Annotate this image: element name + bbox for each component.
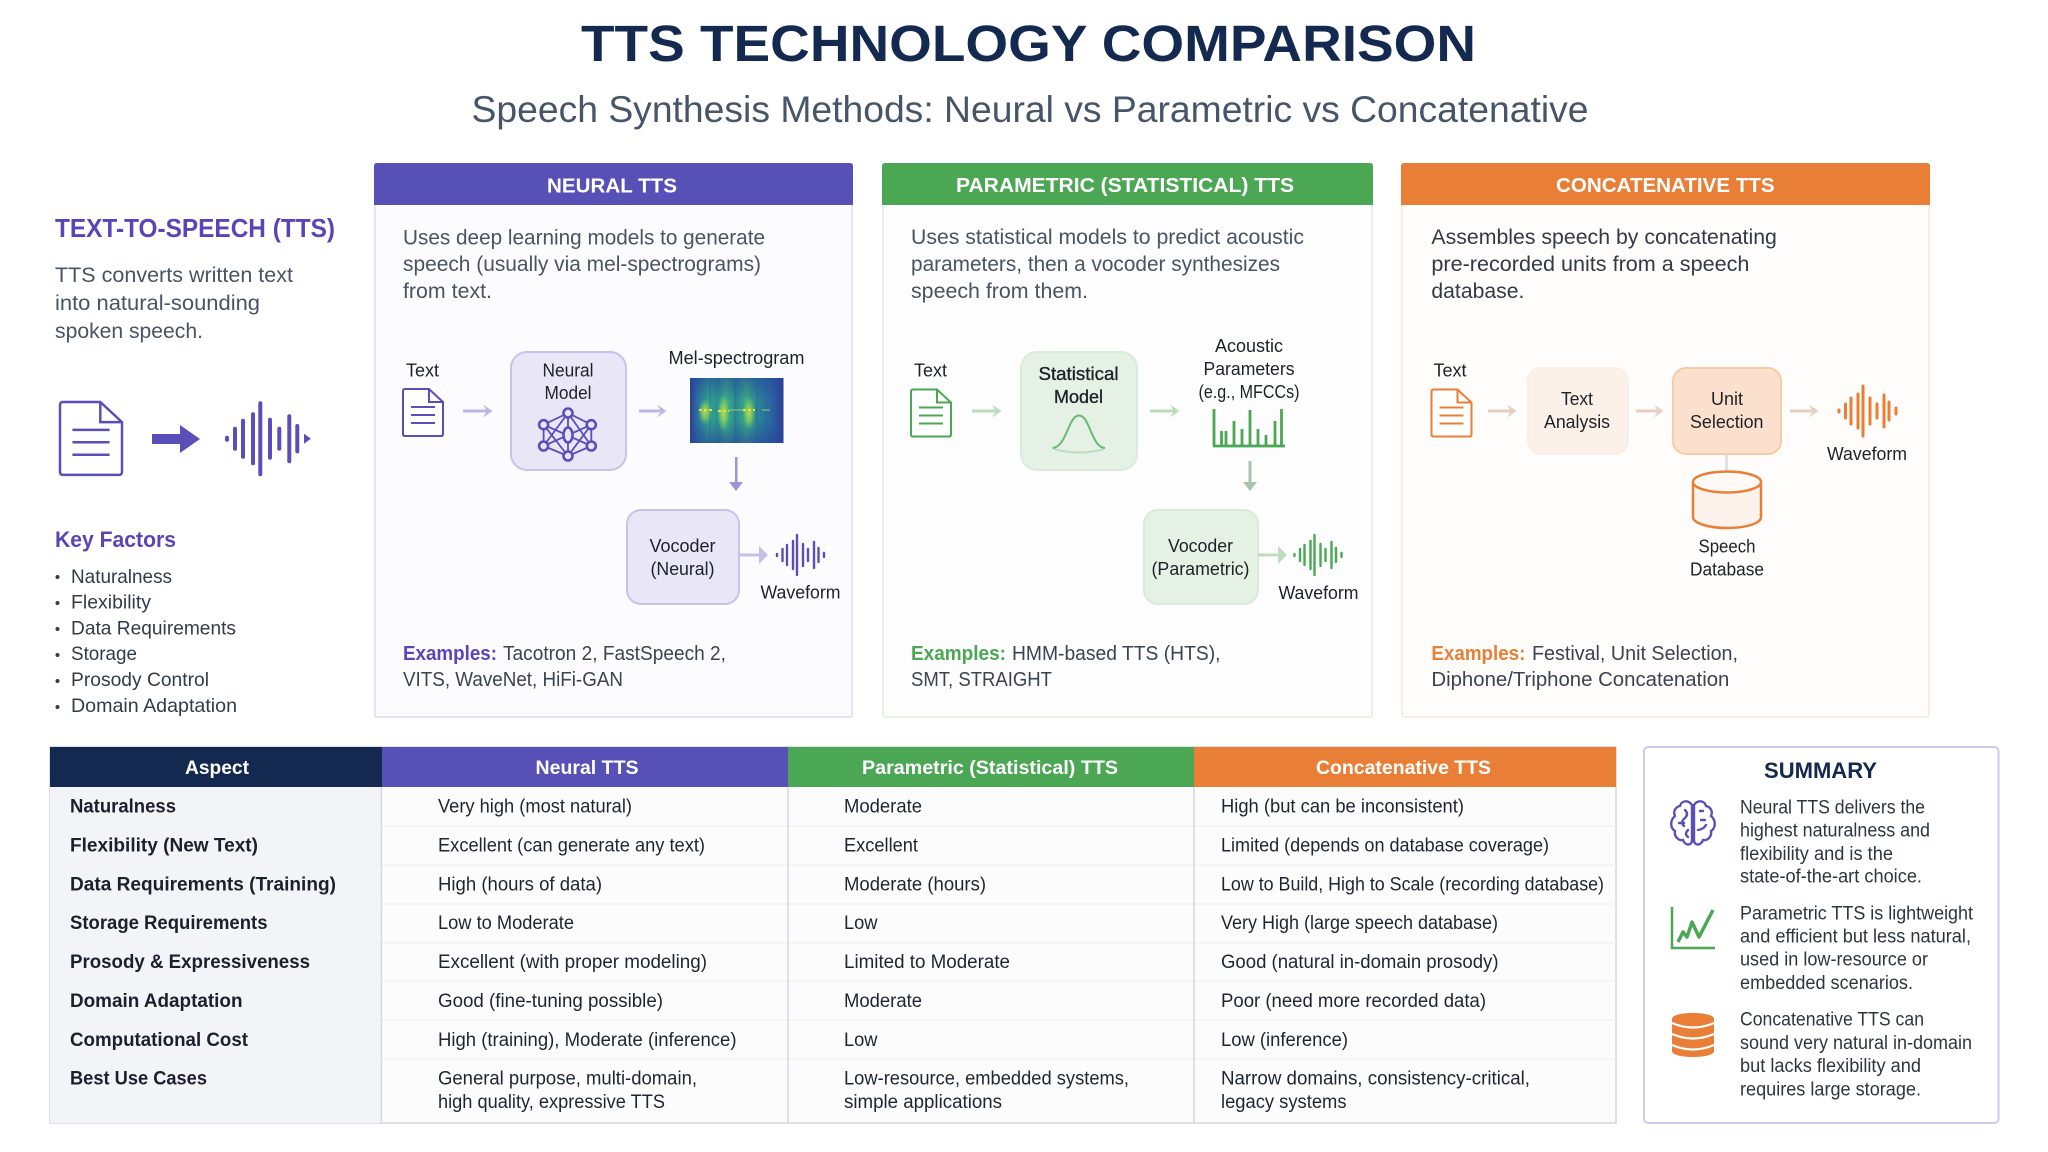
icon: speech database cylinder [1693, 472, 1761, 528]
parametric header [882, 163, 1373, 205]
parametric examples: SMT, STRAIGHT [911, 668, 1052, 691]
neural description [403, 226, 765, 303]
icon: line chart [1672, 907, 1715, 948]
parametric description: parameters, then a vocoder synthesizes [911, 252, 1280, 276]
box: vocoder parametric: Vocoder [1168, 535, 1233, 556]
row: best use cases: high quality, expressive TTS [438, 1092, 665, 1113]
icon: database [1672, 1013, 1714, 1057]
box: neural model: Model [544, 382, 592, 403]
summary text: neural: highest naturalness and [1740, 821, 1930, 842]
panel: neural TTS [374, 163, 853, 717]
row: domain adaptation: Good (fine-tuning possible) [438, 991, 663, 1012]
label: speech database [1690, 536, 1764, 580]
row: storage requirements: Very High (large speech database) [1221, 913, 1498, 934]
summary text: concatenative: sound very natural in-domain [1740, 1033, 1972, 1054]
box: statistical model [1021, 352, 1137, 470]
chart: acoustic bars [1213, 409, 1285, 446]
box: neural model [511, 352, 626, 470]
neural header: NEURAL TTS [547, 174, 677, 198]
neural header [374, 163, 853, 205]
label: text: Text [1434, 360, 1466, 380]
intro paragraph [55, 263, 293, 343]
row: flexibility: Flexibility (New Text) [70, 836, 258, 856]
parametric examples: HMM-based TTS (HTS), [1012, 642, 1220, 665]
key factors list: Naturalness [71, 566, 172, 588]
box: vocoder parametric: (Parametric) [1152, 558, 1250, 579]
intro paragraph: into natural-sounding [55, 291, 260, 315]
row: domain adaptation: Poor (need more recorded data) [1221, 991, 1486, 1012]
icon: document [911, 390, 951, 436]
row: naturalness: Naturalness [70, 796, 176, 818]
row: naturalness: High (but can be inconsistent) [1221, 796, 1464, 818]
arrow [1258, 546, 1287, 564]
row: best use cases: Low-resource, embedded systems, [844, 1068, 1129, 1090]
panel: concatenative TTS [1401, 163, 1930, 717]
row: flexibility [70, 836, 1549, 856]
key factors list: Flexibility [71, 592, 151, 614]
parametric examples [911, 642, 1220, 691]
subtitle: Speech Synthesis Methods: Neural vs Parametric vs Concatenative [472, 89, 1588, 130]
icon: bell curve [1052, 416, 1105, 452]
heading: text-to-speech: TEXT-TO-SPEECH (TTS) [55, 215, 335, 243]
row: computational cost: Computational Cost [70, 1030, 249, 1051]
concatenative description: pre-recorded units from a speech [1431, 252, 1749, 276]
row: storage requirements: Storage Requirements [70, 913, 268, 934]
row: naturalness: Moderate [844, 796, 922, 818]
icon: waveform [777, 535, 824, 575]
box: unit selection: Selection [1690, 411, 1764, 432]
summary text: parametric: used in low-resource or [1740, 950, 1929, 971]
summary text: neural: state-of-the-art choice. [1740, 867, 1922, 888]
summary text: concatenative: but lacks flexibility and [1740, 1056, 1921, 1077]
mel-spectrogram image [690, 378, 784, 443]
label: text: Text [406, 360, 439, 380]
arrow: down [1243, 461, 1257, 491]
neural examples: Tacotron 2, FastSpeech 2, [503, 642, 726, 665]
box: text analysis: Analysis [1544, 411, 1610, 432]
row: best use cases: legacy systems [1221, 1092, 1346, 1113]
parametric description: speech from them. [911, 279, 1088, 303]
box: text analysis: Text [1561, 388, 1593, 409]
summary text: parametric: and efficient but less natural, [1740, 927, 1971, 948]
connector [1725, 454, 1728, 472]
arrow [1636, 404, 1664, 418]
key factors list [56, 566, 237, 717]
table header row: Concatenative TTS [1316, 757, 1491, 779]
concatenative description: database. [1431, 279, 1524, 303]
panel: parametric TTS [882, 163, 1373, 717]
neural examples [403, 642, 726, 691]
row: domain adaptation [70, 991, 1486, 1012]
box: vocoder neural: (Neural) [650, 558, 714, 579]
parametric header: PARAMETRIC (STATISTICAL) TTS [956, 174, 1294, 197]
neural examples: Examples: [403, 642, 497, 665]
intro paragraph: TTS converts written text [55, 263, 293, 287]
row: best use cases: simple applications [844, 1092, 1002, 1113]
row: data requirements: Moderate (hours) [844, 874, 986, 896]
row: flexibility: Excellent [844, 836, 919, 856]
label: speech database: Database [1690, 558, 1764, 580]
row: storage requirements: Low to Moderate [438, 913, 574, 934]
row: prosody: Excellent (with proper modeling) [438, 952, 707, 973]
label: mel-spectrogram: Mel-spectrogram [668, 347, 804, 368]
row: prosody [70, 952, 1498, 973]
label: waveform: Waveform [1278, 582, 1358, 603]
parametric examples: Examples: [911, 642, 1006, 665]
label: acoustic parameters [1198, 335, 1300, 402]
summary text: concatenative: Concatenative TTS can [1740, 1010, 1924, 1031]
concatenative header: CONCATENATIVE TTS [1556, 174, 1775, 197]
parametric description [911, 225, 1304, 303]
row: storage requirements [70, 913, 1498, 934]
box: unit selection [1673, 368, 1781, 454]
row: computational cost [70, 1030, 1348, 1051]
box: vocoder parametric [1144, 510, 1258, 604]
comparison table [50, 747, 1616, 1123]
key factors list: Prosody Control [71, 669, 209, 691]
table background [50, 747, 1616, 1123]
box: vocoder neural: Vocoder [650, 535, 716, 556]
row: storage requirements: Low [844, 913, 878, 934]
arrow [1150, 404, 1180, 418]
summary text: parametric [1740, 903, 1974, 994]
box: neural model: Neural [542, 360, 594, 380]
row: data requirements: Low to Build, High to Scale (recording database) [1221, 874, 1604, 896]
label: waveform: Waveform [1827, 443, 1907, 464]
row: flexibility: Limited (depends on database coverage) [1221, 836, 1549, 856]
icon: waveform [1839, 386, 1896, 436]
key factors list: Data Requirements [71, 618, 236, 640]
icon: document [60, 402, 122, 475]
panel: summary [1644, 747, 1998, 1123]
arrow [1790, 404, 1818, 418]
arrow [739, 546, 768, 564]
concatenative description [1431, 225, 1777, 303]
icon: document [403, 389, 443, 436]
icon: neural network [539, 408, 596, 460]
row: naturalness: Very high (most natural) [438, 796, 632, 818]
icon: waveform [227, 403, 311, 474]
row: computational cost: Low [844, 1030, 878, 1051]
row: naturalness [70, 796, 1464, 818]
row: data requirements [70, 874, 1604, 896]
row: computational cost: Low (inference) [1221, 1030, 1348, 1051]
table header row: Neural TTS [536, 757, 638, 779]
key factors list: Storage [71, 643, 137, 665]
row: domain adaptation: Domain Adaptation [70, 991, 242, 1012]
row: flexibility: Excellent (can generate any text) [438, 836, 705, 856]
concatenative examples [1431, 642, 1738, 691]
summary heading: SUMMARY [1764, 758, 1877, 783]
neural description: from text. [403, 279, 492, 303]
label: text: Text [914, 360, 947, 380]
label: speech database: Speech [1698, 536, 1756, 556]
row: computational cost: High (training), Moderate (inference) [438, 1030, 736, 1051]
left column: TTS intro [55, 215, 335, 717]
summary text: neural: Neural TTS delivers the [1740, 797, 1925, 818]
table header row: Aspect [185, 757, 249, 779]
concatenative examples: Examples: [1431, 642, 1525, 665]
summary text: concatenative: requires large storage. [1740, 1080, 1921, 1101]
label: acoustic parameters: Parameters [1204, 358, 1294, 379]
label: acoustic parameters: Acoustic [1215, 335, 1283, 356]
row: prosody: Limited to Moderate [844, 952, 1010, 973]
row: best use cases: General purpose, multi-domain, [438, 1068, 697, 1090]
box: statistical model: Model [1054, 386, 1103, 407]
summary text: parametric: Parametric TTS is lightweight [1740, 903, 1974, 924]
row: prosody: Prosody & Expressiveness [70, 952, 310, 973]
icon: document [1432, 390, 1472, 436]
heading: key factors: Key Factors [55, 527, 176, 552]
row: domain adaptation: Moderate [844, 991, 922, 1012]
parametric description: Uses statistical models to predict acoustic [911, 225, 1304, 249]
neural description: speech (usually via mel-spectrograms) [403, 252, 761, 276]
icon: waveform [1294, 535, 1342, 575]
arrow [1488, 404, 1516, 418]
concatenative examples: Festival, Unit Selection, [1532, 642, 1738, 665]
arrow [639, 404, 666, 418]
row: prosody: Good (natural in-domain prosody) [1221, 952, 1498, 973]
title: TTS TECHNOLOGY COMPARISON [581, 15, 1476, 72]
label: waveform: Waveform [760, 582, 840, 602]
concatenative description: Assembles speech by concatenating [1431, 225, 1777, 249]
row: data requirements: High (hours of data) [438, 874, 602, 896]
table header row: Parametric (Statistical) TTS [862, 757, 1118, 779]
summary text: neural [1740, 797, 1930, 888]
row: best use cases: Best Use Cases [70, 1068, 207, 1090]
box: statistical model: Statistical [1038, 363, 1118, 384]
box: unit selection: Unit [1711, 388, 1743, 409]
row: best use cases [70, 1068, 1530, 1113]
concatenative header [1401, 163, 1930, 205]
key factors list: Domain Adaptation [71, 695, 237, 717]
summary text: parametric: embedded scenarios. [1740, 973, 1913, 994]
neural description: Uses deep learning models to generate [403, 226, 765, 250]
icon: brain [1671, 801, 1715, 844]
icon: big arrow [152, 425, 200, 453]
summary text: neural: flexibility and is the [1740, 844, 1893, 865]
neural examples: VITS, WaveNet, HiFi-GAN [403, 668, 623, 691]
row: data requirements: Data Requirements (Training) [70, 874, 336, 896]
intro paragraph: spoken speech. [55, 319, 203, 343]
table header row [50, 747, 1616, 787]
box: text analysis [1528, 368, 1628, 454]
arrow [463, 404, 492, 418]
concatenative examples: Diphone/Triphone Concatenation [1431, 668, 1729, 691]
label: acoustic parameters: (e.g., MFCCs) [1198, 381, 1300, 402]
row: best use cases: Narrow domains, consistency-critical, [1221, 1068, 1530, 1090]
summary text: concatenative [1740, 1010, 1972, 1101]
arrow [972, 404, 1002, 418]
box: vocoder neural [627, 510, 739, 604]
arrow: down [729, 457, 743, 491]
